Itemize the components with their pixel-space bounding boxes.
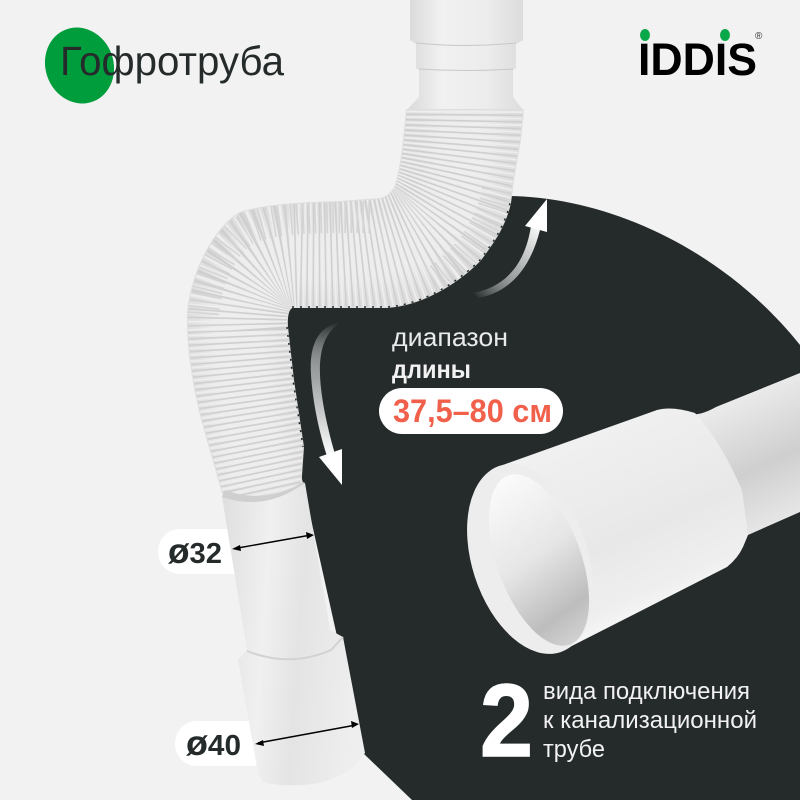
length value pill: 37,5–80 см [393, 393, 552, 429]
pipe neck [690, 373, 800, 535]
diameter pill 40 [175, 721, 275, 766]
bellows body [188, 108, 523, 500]
diameter pill 32 [158, 529, 258, 574]
arrow: length up [473, 199, 547, 298]
label line 2: длины [392, 354, 471, 384]
text: length range label [392, 322, 508, 384]
pipe socket body [500, 409, 748, 652]
description line 3: трубе [543, 736, 605, 763]
label line 1: диапазон [392, 322, 508, 352]
big numeral 2: 2 [480, 663, 533, 778]
dimension arrow 40 [255, 721, 359, 746]
dimension arrow 32 [232, 532, 314, 551]
connection types text [480, 663, 757, 778]
diameter pill 32: ø32 [168, 532, 222, 571]
diameter pill 40: ø40 [186, 724, 241, 763]
top pipe socket [407, 0, 523, 110]
description line 2: к канализационной [543, 707, 757, 734]
dark background shape [280, 196, 800, 800]
logo wordmark: IDDIS [638, 34, 757, 85]
registered mark: ® [755, 31, 763, 42]
title text: Гофротруба [60, 38, 284, 84]
pipe opening rim [445, 448, 615, 670]
pipe opening interior [469, 461, 609, 659]
logo: IDDIS [638, 29, 763, 85]
logo green dots [640, 29, 730, 41]
pipe end close-up [445, 373, 800, 670]
lower collar [222, 482, 365, 785]
description line 1: вида подключения [543, 678, 750, 705]
green blob behind title [34, 18, 125, 113]
arrow: length down [311, 322, 342, 485]
corrugated pipe [188, 0, 523, 785]
title: Гофротруба [34, 18, 284, 113]
